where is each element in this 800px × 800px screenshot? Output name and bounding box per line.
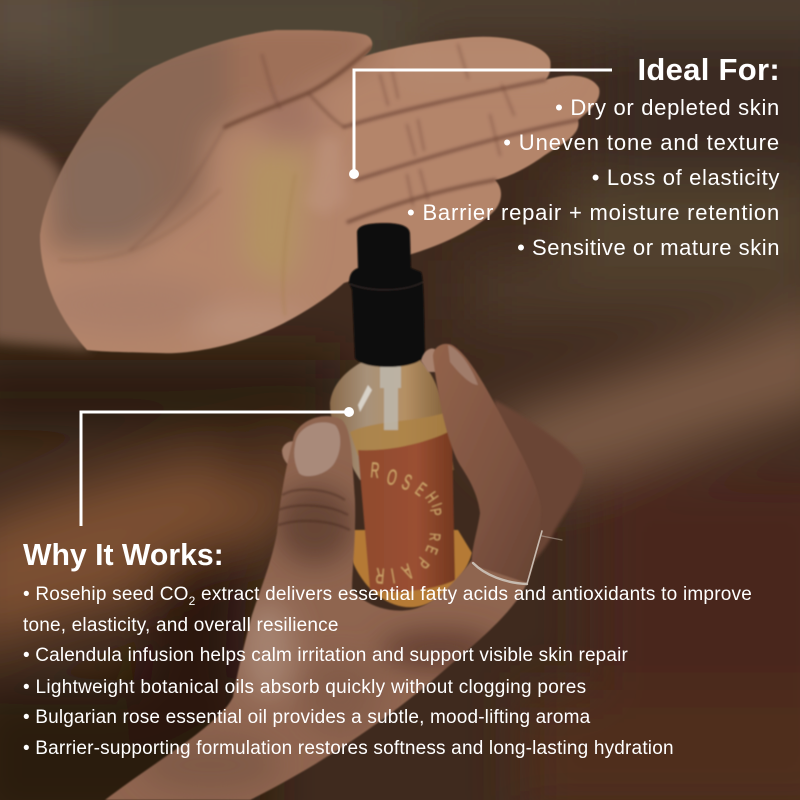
- back finger of holding hand: [490, 400, 583, 570]
- list: why it works: tone, elasticity, and overall resilience: [23, 615, 339, 636]
- label lettering: I: [428, 501, 445, 509]
- list: why it works: • Barrier-supporting formulation restores softness and long-lasting hydration: [23, 738, 674, 759]
- fold bumps at finger base: [311, 142, 342, 210]
- label lettering: S: [399, 469, 415, 495]
- label lettering: P: [412, 553, 432, 572]
- dip tube: [380, 364, 401, 430]
- right finger: [433, 344, 541, 583]
- label lettering: I: [389, 563, 397, 588]
- list: why it works: • Rosehip seed CO2 extract delivers essential fatty acids and antioxidants to improve: [23, 584, 752, 608]
- list: ideal for: • Dry or depleted skin: [555, 95, 780, 120]
- icon: black pump cap: [349, 223, 425, 367]
- label lettering: R: [375, 563, 385, 588]
- thumb nail: [294, 422, 340, 476]
- list: why it works: • Calendula infusion helps calm irritation and support visible skin repair: [23, 645, 628, 666]
- label lettering: P: [427, 507, 445, 517]
- list: ideal for: • Uneven tone and texture: [503, 130, 780, 155]
- open hand: [40, 20, 599, 353]
- label lettering: [370, 458, 445, 588]
- list: ideal for: [407, 95, 780, 260]
- pinkish finger tip behind bottle: [421, 348, 438, 372]
- terracotta label: [358, 430, 455, 592]
- label lettering: R: [370, 458, 380, 483]
- label lettering: O: [384, 464, 400, 490]
- silver ring: [473, 531, 562, 584]
- list: why it works: • Bulgarian rose essential oil provides a subtle, mood-lifting aroma: [23, 707, 590, 728]
- list: why it works: [23, 584, 752, 759]
- forearm of open hand: [0, 130, 90, 350]
- list: why it works: • Lightweight botanical oils absorb quickly without clogging pores: [23, 677, 586, 698]
- glass shoulder: [330, 360, 454, 480]
- finger nail: [448, 345, 478, 385]
- bottle oil glow: [350, 530, 472, 607]
- list: ideal for: • Sensitive or mature skin: [517, 235, 780, 260]
- label lettering: R: [426, 532, 444, 542]
- label lettering: E: [411, 479, 429, 501]
- label lettering: E: [422, 543, 442, 557]
- label lettering: H: [421, 489, 441, 507]
- glass highlight: [358, 385, 372, 412]
- heading: ideal for: Ideal For:: [637, 52, 780, 87]
- heading: why it works: Why It Works:: [23, 539, 224, 572]
- label lettering: A: [398, 559, 418, 585]
- finger folds: [128, 44, 580, 314]
- oil bottle: [330, 223, 472, 607]
- list: ideal for: • Loss of elasticity: [592, 165, 780, 190]
- list: ideal for: • Barrier repair + moisture retention: [407, 200, 780, 225]
- holding hand: [105, 344, 541, 800]
